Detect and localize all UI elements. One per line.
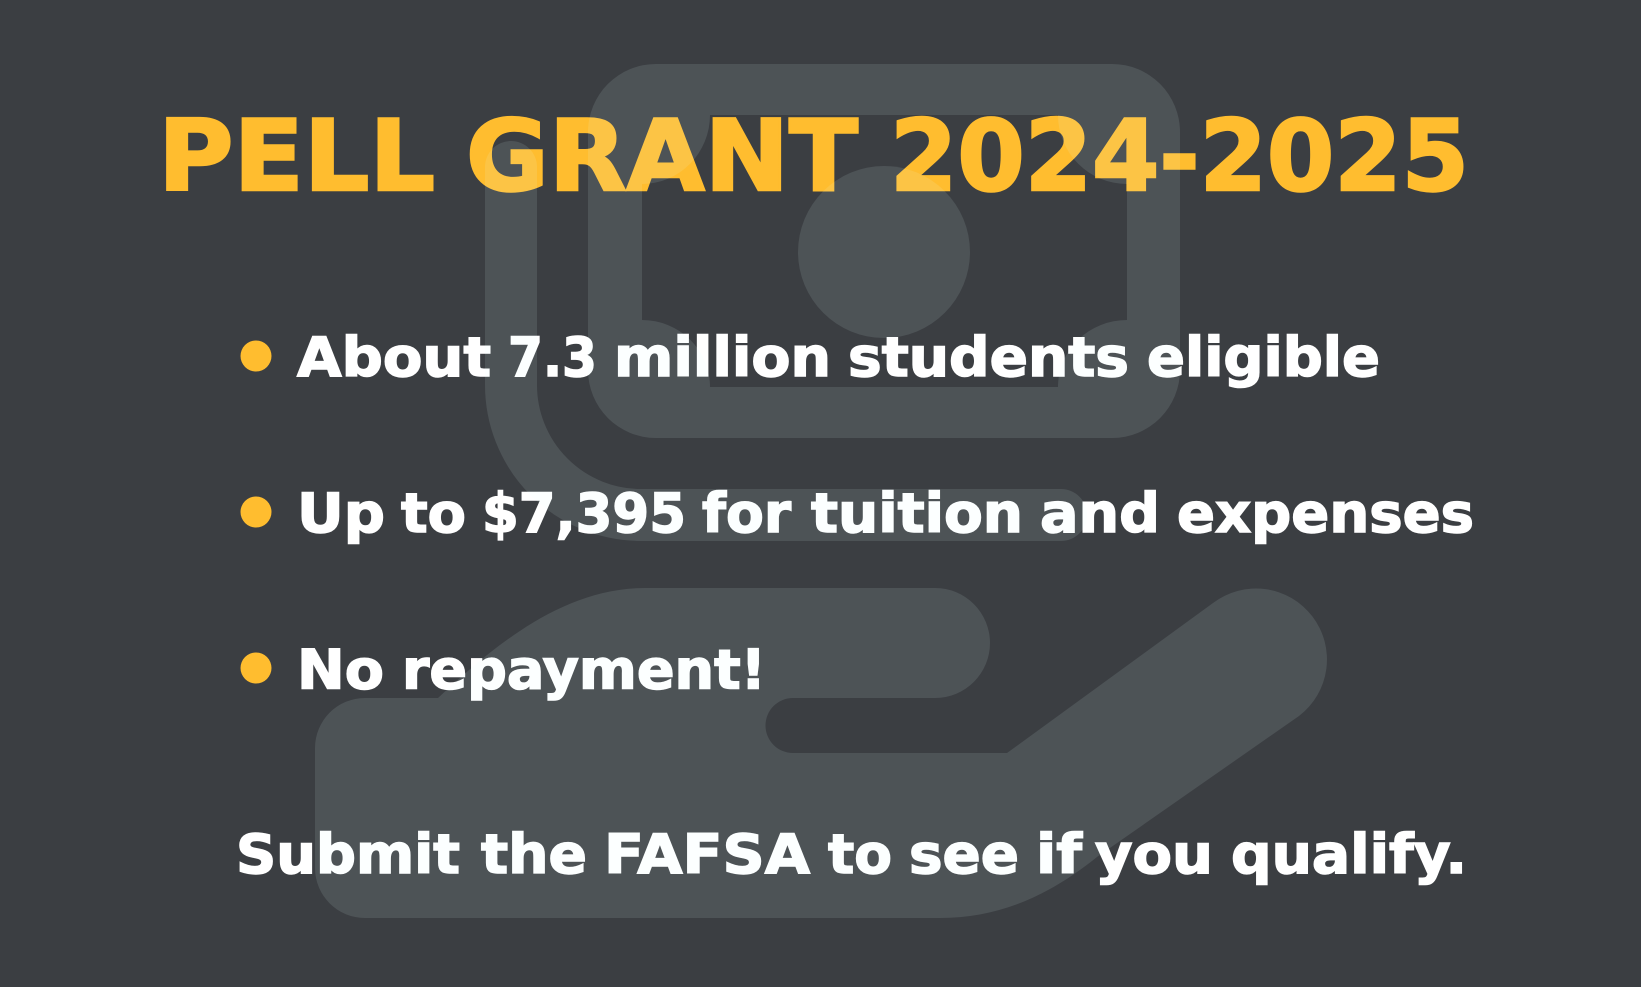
bullet 2: award amount: tuition — [811, 482, 1023, 545]
call to action: you — [1095, 823, 1213, 886]
title: PELL — [158, 100, 435, 214]
bullet 3: no repayment: No — [297, 638, 384, 702]
bullet 2: award amount: Up — [297, 482, 385, 545]
call to action: the — [481, 823, 587, 886]
bullet 2: award amount: to — [401, 482, 466, 545]
bullet 2: award amount: expenses — [1177, 482, 1474, 545]
bullet 2: award amount: and — [1040, 482, 1160, 545]
icon: back banknote edge — [511, 167, 1061, 515]
title: GRANT — [466, 100, 858, 214]
title: 2024-2025 — [890, 100, 1469, 214]
bullet 2: award amount: for — [702, 482, 791, 545]
bullet 3: no repayment: repayment! — [402, 638, 766, 702]
call to action: Submit — [236, 823, 460, 886]
bullet 1: eligibility: million — [614, 326, 831, 389]
bullet 2: award amount — [240, 482, 1474, 545]
icon: banknote centre coin — [798, 166, 970, 338]
bullet 1: eligibility: 7.3 — [508, 326, 597, 389]
call to action: qualify. — [1231, 823, 1467, 886]
bullet 1: eligibility — [240, 326, 1380, 389]
bullet 3: no repayment — [240, 638, 766, 702]
watermark icon: hand holding money — [315, 64, 1327, 918]
call to action: FAFSA — [604, 823, 810, 886]
bullet 2: award amount: $7,395 — [482, 482, 686, 545]
icon: front banknote — [588, 64, 1180, 438]
bullet 1: eligibility: About — [297, 326, 491, 389]
bullet list — [240, 326, 1474, 702]
call to action: see — [909, 823, 1019, 886]
bullet 1: eligibility: eligible — [1147, 326, 1380, 389]
icon: open hand — [315, 588, 1327, 918]
call to action: if — [1036, 823, 1083, 886]
bullet 1: eligibility: students — [848, 326, 1129, 389]
call to action: to — [828, 823, 892, 886]
